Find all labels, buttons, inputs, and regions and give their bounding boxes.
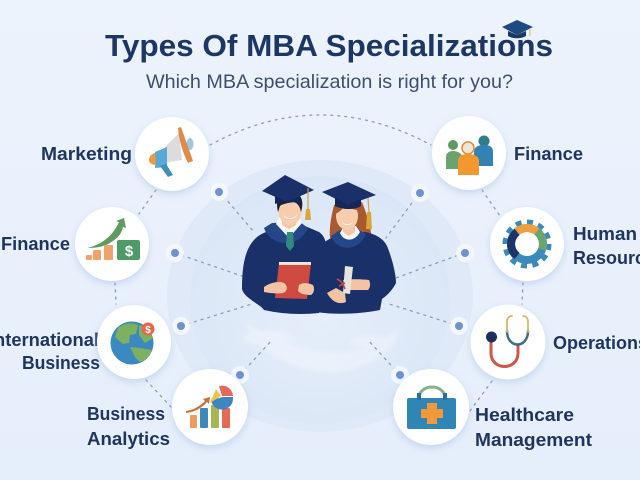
icon: medical bag <box>407 387 456 429</box>
icon: growth and dollar <box>86 218 140 260</box>
icon: megaphone <box>149 127 194 177</box>
graduate: man <box>242 175 327 314</box>
panel: Healthcare Management: Management <box>475 430 592 450</box>
icon: gear <box>505 222 549 266</box>
panel: Human Resources <box>490 207 640 281</box>
icon: small graduation cap <box>502 20 533 38</box>
title: Types Of MBA Specializations <box>105 28 553 63</box>
icon: globe <box>110 322 154 364</box>
icon: growth and dollar: $ <box>125 243 134 260</box>
panel: Finance (left) <box>1 207 149 281</box>
central backdrop circle <box>167 160 473 432</box>
panel: Healthcare Management: Healthcare <box>475 405 574 425</box>
icon: globe: $ <box>145 325 151 336</box>
panel: Finance (right) <box>432 116 583 190</box>
panel: Finance (left): Finance <box>1 234 70 254</box>
panel: Finance (right): Finance <box>514 144 583 164</box>
icon: stethoscope <box>486 316 528 366</box>
icon: people <box>446 136 493 175</box>
panel: Business Analytics <box>87 369 248 449</box>
panel: Human Resources: Human <box>573 224 637 244</box>
panel: Marketing: Marketing <box>41 144 132 164</box>
dashed connectors <box>115 115 523 411</box>
central illustration: graduates <box>242 175 396 314</box>
graduate: woman <box>312 182 396 314</box>
panel: Business Analytics: Business <box>87 404 165 424</box>
icon: chart and pie <box>186 386 233 428</box>
panel: International Business <box>0 305 171 379</box>
connector nodes <box>166 183 474 384</box>
panel: Business Analytics: Analytics <box>87 429 170 449</box>
panel: Healthcare Management <box>393 369 592 450</box>
panel: Operations <box>470 304 640 380</box>
subtitle: Which MBA specialization is right for you? <box>146 71 513 93</box>
panel: Marketing <box>41 117 209 191</box>
panel: International Business: Business <box>22 353 100 373</box>
